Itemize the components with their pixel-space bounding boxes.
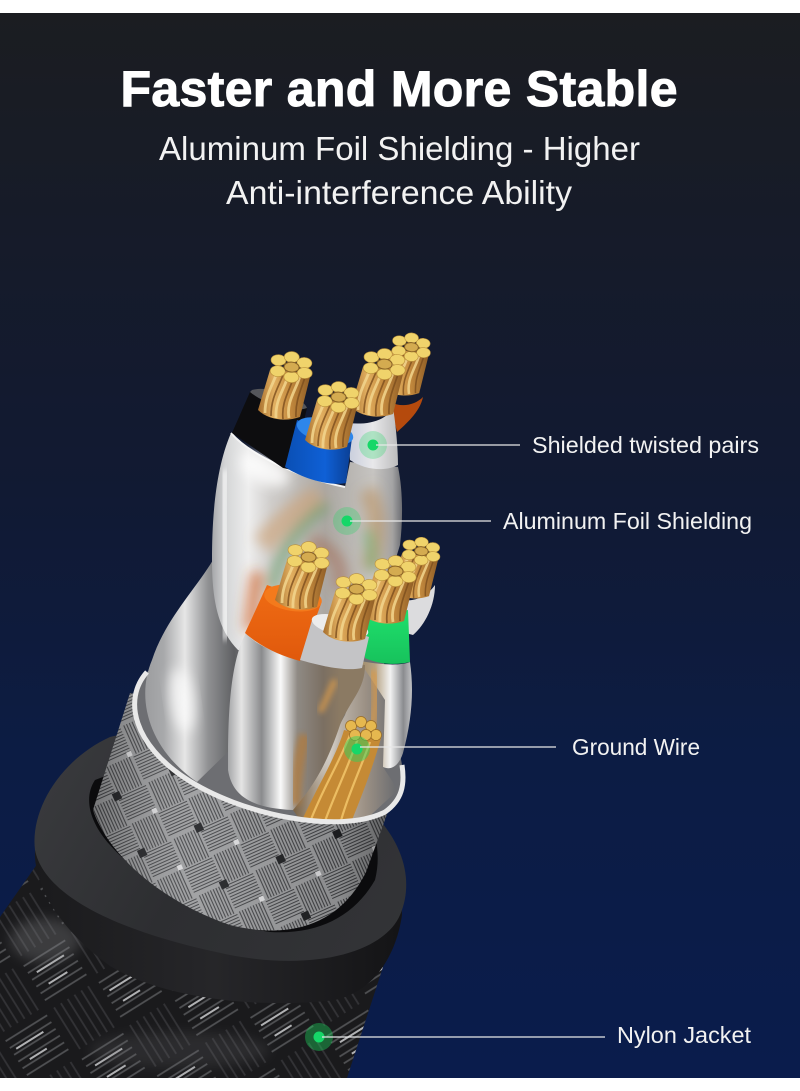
white pair [348,347,407,469]
nylon jacket [0,860,395,1078]
tan reflection area [293,668,390,818]
callout: shielded twisted pairs [359,431,759,459]
upper twisted silver shielding [212,433,402,660]
callout: nylon jacket: Nylon Jacket [617,1022,752,1048]
back orange pair [381,332,432,432]
callout: aluminum foil shielding [333,507,752,535]
lower center silver pair [228,633,365,810]
right silver lobe [350,660,412,768]
black ring [34,720,406,1003]
subtitle: Aluminum Foil Shielding - Higher [159,130,640,167]
callout: aluminum foil shielding: Aluminum Foil Shielding [503,508,752,534]
subtitle [159,130,640,211]
title: Faster and More Stable [120,61,678,117]
callout: shielded twisted pairs: Shielded twisted pairs [532,432,759,458]
green pair [362,554,418,664]
right white pair [391,536,441,635]
left silver lobe [145,560,253,782]
silver rim [135,672,403,822]
blue pair [285,380,361,484]
white top edge [231,433,345,487]
subtitle: Anti-interference Ability [226,174,573,211]
cable illustration [0,332,441,1078]
callout: nylon jacket [305,1022,752,1051]
callout: ground wire: Ground Wire [572,734,700,760]
orange pair [245,540,331,661]
callout: ground wire [344,734,700,762]
inside of braid [135,620,403,822]
black pair [232,350,314,470]
metal braid [93,693,402,931]
ground wire [300,716,382,825]
white lower pair [300,572,379,669]
foil reflections [250,490,376,630]
